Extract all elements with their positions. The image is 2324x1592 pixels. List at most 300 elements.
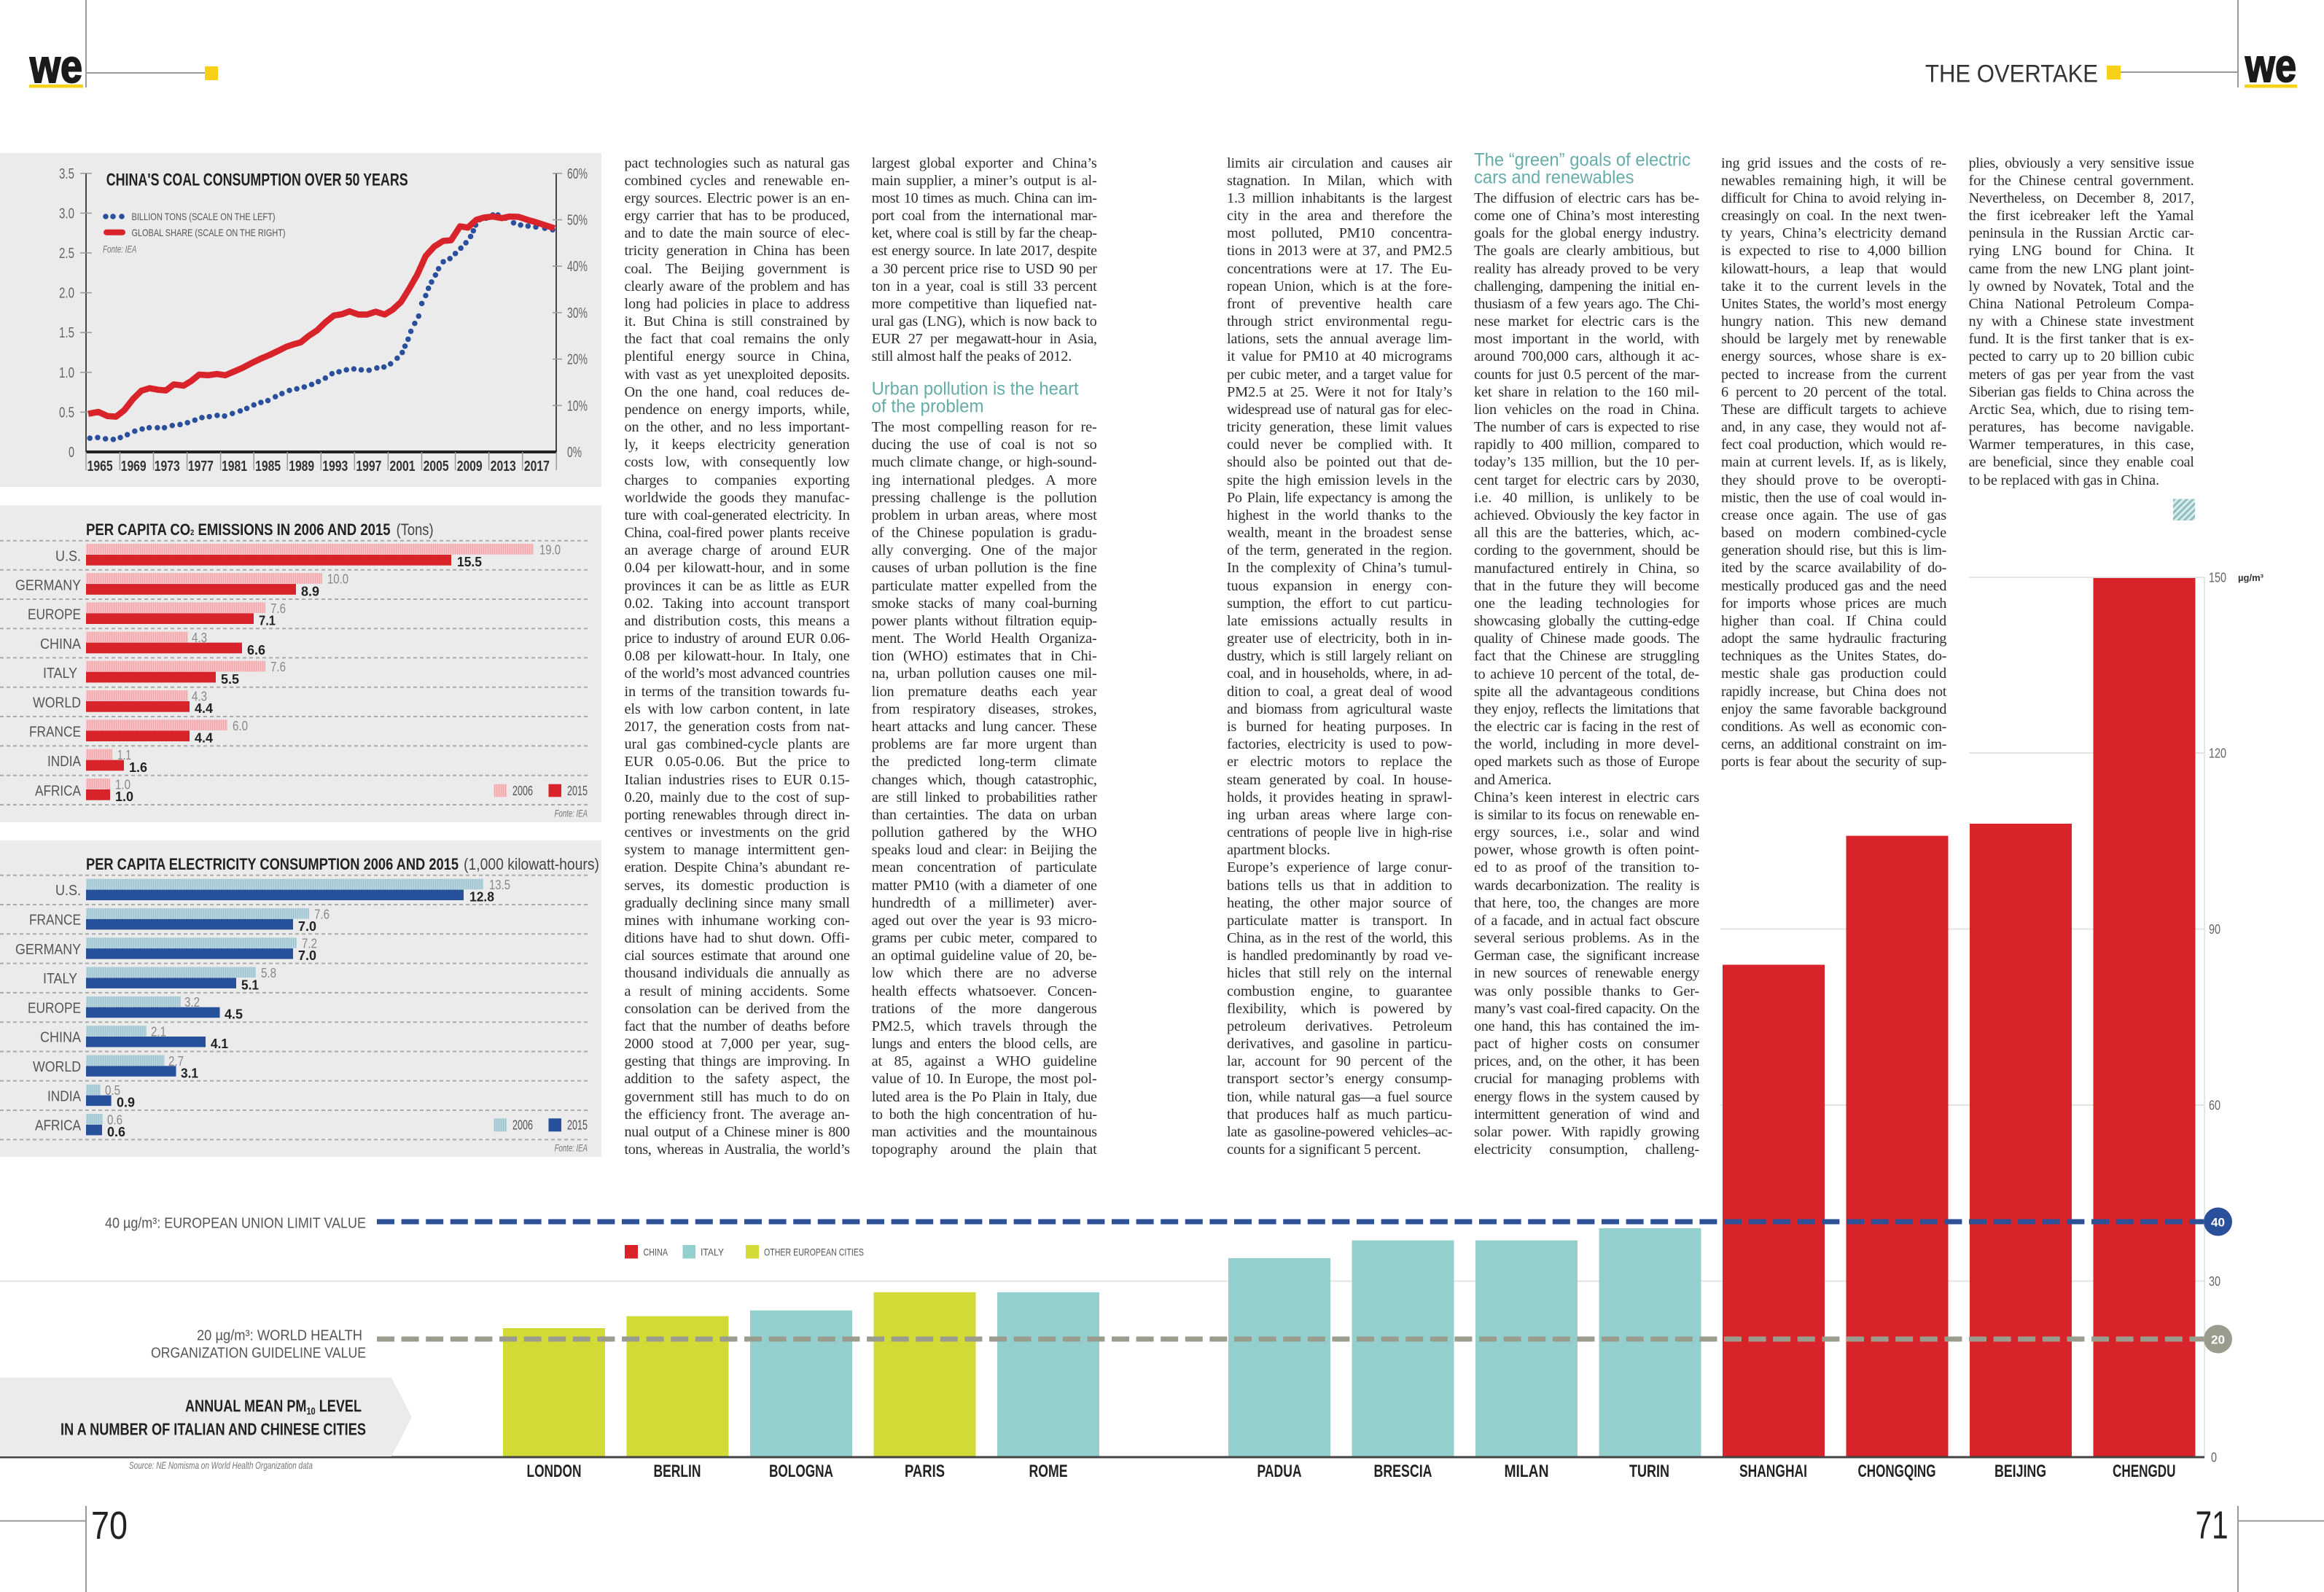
text column 5: take it to the current levels in the [1721,278,1946,294]
text column 2: low which there are no adverse [872,965,1097,981]
text column 4: of a facade, and in actual fact obscure [1474,913,1699,929]
text column 2: ally converging. One of the major [872,542,1097,558]
text column 4: lion vehicles on the road in China. [1474,402,1699,418]
city labels [526,1462,2175,1481]
text column 2: much climate change, or high-sound- [872,454,1097,470]
text column 5: rapidly increase, but China does not [1721,684,1946,700]
text column 3: ropean Union, which is at the fore- [1227,278,1452,294]
header right: section title and logo: we [2245,39,2296,92]
text column 4: that in the future they will become [1474,578,1699,594]
text column 2: health effects whatsoever. Concen- [872,983,1097,999]
text column 1: charges to companies exporting [624,472,850,488]
row: Africa: 1.0 [115,789,133,804]
text column 5: conditions. As well as economic con- [1721,719,1946,735]
text column 3: China, as in the rest of the world, this [1227,930,1452,946]
row: U.S.: U.S. [55,548,81,564]
text column 2: EUR 27 per megawatt-hour in Asia, [872,331,1097,347]
row: Germany: 7.2 [302,937,317,951]
row: Germany: GERMANY [15,577,81,593]
text column 6: peratures, has become navigable. [1968,419,2194,435]
text column 1: ural gas combined-cycle plants are [624,736,850,752]
text column 1: it. But China is still constrained by [624,313,850,329]
text column 2: power plants without filtration equip- [872,613,1097,629]
bar chart: annual mean PM10 by city [0,570,2264,1481]
chart title: (Tons) [397,520,434,539]
text column 4: The goals are clearly ambitious, but [1474,243,1699,259]
row: Africa: 0.6 [107,1125,125,1139]
limit line: WHO 20: 20 [2211,1332,2225,1347]
chart legend: BILLION TONS (SCALE ON THE LEFT) [131,211,276,222]
text column 1: pendence on energy imports, while, [624,402,850,418]
text column 3: it value for PM10 at 40 micrograms [1227,348,1452,364]
header right: section title and logo: THE OVERTAKE [1925,60,2098,87]
legend: 2006 and 2015 [494,784,588,798]
row: Africa: AFRICA [35,783,82,799]
text column 2: pressing challenge is the pollution [872,490,1097,506]
text column 5 [1721,155,1946,770]
text column 4: all this are the batteries, which, ac- [1474,525,1699,541]
text column 4 [1474,190,1700,1158]
text column 1: ly, it keeps electricity generation [624,437,850,453]
callout arrow: PM10 chart title: 10 [306,1405,316,1417]
text column 2: changes which, though catastrophic, [872,772,1097,788]
text column 2: largest global exporter and China’s [872,155,1097,171]
text column 2: still almost half the peaks of 2012. [872,348,1072,364]
text column 3: late emissions actually results in [1227,613,1452,629]
text column 4: spite all the advantageous conditions [1474,684,1699,700]
text column 2: than certainties. The data on urban [872,807,1097,823]
row: France: FRANCE [29,725,81,741]
text column 2: value of 10. In Europe, the most pol- [872,1071,1097,1087]
text column 2: man activities and the mountainous [872,1124,1097,1140]
text column 3: coal, and in households, where, in ad- [1227,666,1452,682]
label: EU limit value: 40 µg/m³: EUROPEAN UNION LIMIT VALUE [105,1216,366,1232]
text column 4: many’s vast coal-fired capacity. On the [1474,1001,1699,1017]
row: U.S. [55,542,561,569]
heading: urban pollution: of the problem [872,397,984,417]
text column 3: Europe’s experience of large conur- [1227,859,1452,875]
text column 4: oped markets such as those of Europe [1474,754,1699,770]
text column 3: is burned for heating purposes. In [1227,719,1452,735]
text column 3: 1.3 million inhabitants is the largest [1227,190,1452,206]
text column 3: and biomass from agricultural waste [1227,701,1452,717]
text column 1: clearly aware of the problem and has [624,278,850,294]
text column 2: from respiratory diseases, strokes, [872,701,1097,717]
header right: section title and logo [1925,0,2297,92]
row: Italy: 5.1 [241,978,259,992]
text column 4: today’s 135 million, but the 10 per- [1474,454,1699,470]
limit line: WHO 20 [377,1325,2232,1353]
right axis with percent scale: 0% [567,445,582,461]
text column 2: trations of the more dangerous [872,1001,1097,1017]
text column 4: one the leading technologies for [1474,596,1699,612]
text column 4: cent target for electric cars by 2030, [1474,472,1699,488]
text column 5: enjoy the same favorable background [1721,701,1946,717]
text column 4: ergy sources, i.e., solar and wind [1474,824,1699,840]
heading: green goals [1474,150,1691,188]
text column 3: is handled predominantly by road ve- [1227,948,1452,964]
value axis labels: 60 [2209,1098,2220,1112]
row: France: 7.6 [314,907,330,921]
text column 4: quality of Chinese made goods. The [1474,631,1699,647]
text column 1: 0.20, mainly due to the cost of sup- [624,789,850,805]
text column 4: ed to as proof of the transition to- [1474,859,1699,875]
row: Africa [35,777,133,804]
text column 5: ing grid issues and the costs of re- [1721,155,1946,171]
text column 2: ment. The World Health Organiza- [872,631,1097,647]
text column 3: dition to coal, a great deal of wood [1227,684,1452,700]
city labels: CHENGDU [2113,1462,2175,1481]
text column 6: fund. It is the first tanker that is ex- [1968,331,2194,347]
text column 3: lations, sets the annual average lim- [1227,331,1452,347]
text column 5: main at current levels. If, as is likely, [1721,454,1946,470]
text column 4: is similar to its focus on renewable en- [1474,807,1699,823]
text column 5: techniques as the Unites States, do- [1721,648,1946,664]
text column 1: gesting that things are improving. In [624,1053,850,1069]
text column 5: hungry nation. This new demand [1721,313,1946,329]
text column 1: addition to the safety aspect, the [624,1071,850,1087]
text column 2: ing international pledges. A more [872,472,1097,488]
baseline and year labels: 1981 [222,459,247,475]
text column 4: ket share in relation to the 160 mil- [1474,384,1699,400]
baseline and year labels: 2009 [457,459,483,475]
text column 2: lion premature deaths each year [872,684,1097,700]
text column 3: highest in the world thanks to the [1227,507,1452,523]
text column 5: for imports whose prices are much [1721,596,1946,612]
text column 3: tuous expansion in energy con- [1227,578,1452,594]
panel: per capita electricity consumption bar chart [0,840,601,1157]
text column 6: Siberian gas fields to China across the [1968,384,2194,400]
chart title: PER CAPITA CO2 EMISSIONS IN 2006 AND 2015 [86,520,391,539]
text column 1: mines with inhumane working con- [624,913,850,929]
text column 6 [1968,155,2194,488]
row: China [40,631,265,658]
row: France: 4.4 [195,730,213,745]
text column 5: should be largely met by renewable [1721,331,1946,347]
text column 1: costs low, with consequently low [624,454,850,470]
text column 3: wealth, meant in the broadest sense [1227,525,1452,541]
text column 3: hicles that still rely on the internal [1227,965,1452,981]
text column 4: was only possible thanks to Ger- [1474,983,1699,999]
text column 1: and distribution costs, this means a [624,613,850,629]
text column 3: most polluted, PM10 concentra- [1227,225,1452,241]
text column 5: ty years, China’s electricity demand [1721,225,1946,241]
text column 1: 0.02. Taking into account transport [624,596,850,612]
text column 3: petroleum derivatives. Petroleum [1227,1018,1452,1034]
text column 2: an optimal guideline value of 20, be- [872,948,1097,964]
text column 5: mestic shale gas production could [1721,666,1946,682]
text column 5: generation should rise, but this is lim- [1721,542,1946,558]
text column 1: long had policies in place to address [624,296,850,312]
row: China [40,1025,228,1051]
text column 6: for the Chinese central government. [1968,173,2194,189]
heading: green goals: The “green” goals of electric [1474,150,1691,171]
text column 1: government still has much to do on [624,1089,850,1105]
baseline and year labels: 1965 [87,459,113,475]
heading: green goals: cars and renewables [1474,168,1634,188]
text column 3: should also be pointed out that de- [1227,454,1452,470]
text column 4: manufactured entirely in China, so [1474,560,1699,576]
text column 5: ited by the scarce availability of do- [1721,560,1946,576]
text column 4: in new sources of renewable energy [1474,965,1699,981]
text column 3: per cubic meter, and a target value for [1227,367,1452,383]
row: Italy: 5.8 [261,966,276,980]
text column 1: combined cycles and renewable en- [624,173,850,189]
text column 4: electricity consumption, challeng- [1474,1142,1699,1158]
text column 2: na, urban pollution causes one mil- [872,666,1097,682]
text column 3: spite the high emission levels in the [1227,472,1452,488]
callout arrow: PM10 chart title: ANNUAL MEAN PM [185,1397,340,1416]
text column 3: dustry, which is still largely reliant on [1227,648,1452,664]
right axis with percent scale: 30% [567,305,588,321]
row: Italy [43,660,286,687]
text column 2: hundredth of a millimeter) aver- [872,895,1097,911]
text column 2: smoke stacks of many coal-burning [872,596,1097,612]
text column 4: most important in the world, with [1474,331,1699,347]
chart title: PER CAPITA ELECTRICITY CONSUMPTION 2006 AND 2015 [86,855,459,873]
text column 4: around 700,000 cars, although it ac- [1474,348,1699,364]
text column 3: concentrations were at 17. The Eu- [1227,261,1452,277]
text column 3: apartment blocks. [1227,842,1330,858]
icon: hatched end-of-article mark [2173,499,2195,520]
chart legend: Fonte: IEA [103,243,137,255]
text column 6: the first icebreaker left the Yamal [1968,208,2194,224]
text column 1: 2000 stood at 7,000 per year, sug- [624,1036,850,1052]
row: Europe: 7.1 [259,614,276,628]
city labels: TURIN [1629,1462,1669,1481]
row: Italy: ITALY [43,971,77,987]
text column 3: derivatives, and gasoline in particu- [1227,1036,1452,1052]
row: World: 2.7 [168,1054,184,1069]
text column 1: serves, its domestic production is [624,878,850,894]
text column 2: problem in urban areas, where most [872,507,1097,523]
text column 1: pact technologies such as natural gas [624,155,850,171]
legend: city groups: ITALY [701,1246,725,1258]
text column 1: on the other, and no less important- [624,419,850,435]
text column 2: a 30 percent price rise to USD 90 per [872,261,1097,277]
text column 1: tricity generation in China has been [624,243,850,259]
text column 3: lar, account for 90 percent of the [1227,1053,1452,1069]
text column 3: ing urban areas where large con- [1227,807,1452,823]
label: WHO guideline value [151,1328,366,1362]
text column 1: with vast as yet unexploited deposits. [624,367,850,383]
text column 1: coal. The Beijing government is [624,261,850,277]
text column 5: difficult for China to avoid relying in- [1721,190,1946,206]
city labels: SHANGHAI [1739,1462,1807,1481]
text column 2: at 85, against a WHO guideline [872,1053,1097,1069]
text column 2: more competitive than liquefied nat- [872,296,1097,312]
callout arrow: PM10 chart title [0,1378,412,1456]
text column 3: widespread use of natural gas for elec- [1227,402,1452,418]
baseline and year labels: 2013 [491,459,516,475]
text column 1: provinces it can be as little as EUR [624,578,850,594]
city labels: BRESCIA [1373,1462,1432,1481]
left axis with scale: 2.5 [59,246,74,262]
right axis with percent scale: 20% [567,352,588,368]
text column 1: els with low carbon content, in late [624,701,850,717]
text column 1: China, coal-fired power plants receive [624,525,850,541]
right axis with percent scale: 40% [567,259,588,275]
text column 5: Unites States, the world’s most energy [1721,296,1946,312]
row: China: CHINA [40,636,82,652]
row: World: WORLD [33,695,81,711]
text column 4: to achieve 10 percent of the total, de- [1474,666,1699,682]
row: India: 1.6 [129,760,147,775]
text column 1: 0.08 per kilowatt-hour. In Italy, one [624,648,850,664]
source note: Fonte: IEA [555,1142,588,1153]
value axis labels: 90 [2209,922,2220,937]
row: Italy [43,966,276,992]
text column 3: of the term, generated in the region. [1227,542,1452,558]
text column 1: centives or investments on the grid [624,824,850,840]
value axis labels: 150 [2209,570,2226,585]
right axis with percent scale: 60% [567,166,588,182]
row: Italy: 7.6 [270,660,286,674]
header left: logo and rule [29,0,218,93]
text column 1: ditions have had to shut down. Offi- [624,930,850,946]
text column 1: and to date the main source of elec- [624,225,850,241]
text column 6: China National Petroleum Compa- [1968,296,2194,312]
text column 2: aged out over the year is 93 micro- [872,913,1097,929]
legend: city groups: CHINA [643,1246,668,1258]
text column 1: of the world’s most advanced countries [624,666,850,682]
text column 5: fect coal production, which would re- [1721,437,1946,453]
label: WHO guideline value: ORGANIZATION GUIDELINE VALUE [151,1346,366,1362]
text column 3: could never be complied with. It [1227,437,1452,453]
city labels: BERLIN [653,1462,701,1481]
text column 3: transport sector’s energy consump- [1227,1071,1452,1087]
text column 2: tion (WHO) estimates that in Chi- [872,648,1097,664]
text column 3: In the complexity of China’s tumul- [1227,560,1452,576]
text column 4: showcasing globally the cutting-edge [1474,613,1699,629]
text column 1: system to manage intermittent gen- [624,842,850,858]
text column 3: er electric motors to replace the [1227,754,1452,770]
text column 5: cerns, an additional constraint on im- [1721,736,1946,752]
text column 6: meters of gas per year from the vast [1968,367,2194,383]
chart legend [103,211,286,255]
text column 2: main supplier, a miner’s output is al- [872,173,1097,189]
baseline and year labels: 2001 [389,459,416,475]
text column 6: Warmer temperatures, in this case, [1968,437,2194,453]
text column 2: port coal from the international mar- [872,208,1097,224]
legend: 2006 and 2015: 2015 [567,784,588,798]
text column 5: they should prove to be overopti- [1721,472,1946,488]
text column 3: city in the area and therefore the [1227,208,1452,224]
value axis labels: 30 [2209,1274,2220,1289]
baseline and year labels: 1989 [289,459,314,475]
text column 2: luted area is the Po Plain in Italy, due [872,1089,1097,1105]
text column 6: peninsula in the Russian Arctic car- [1968,225,2194,241]
text column 2: to both the high concentration of hu- [872,1107,1097,1123]
text column 4: prices, and, on the other, it has been [1474,1053,1699,1069]
row: France: FRANCE [29,913,81,929]
text column 1: fact that the number of deaths before [624,1018,850,1034]
text column 5: creasingly on coal. In the next twen- [1721,208,1946,224]
text column 6: pected to carry up to 20 billion cubic [1968,348,2194,364]
row: China: 4.1 [211,1037,228,1051]
city labels: LONDON [526,1462,582,1481]
text column 4: thusiasm of a few years ago. The Chi- [1474,296,1699,312]
text column 4: solar power. With rapidly growing [1474,1124,1699,1140]
text column 1: tons, whereas in Australia, the world’s [624,1142,850,1158]
row: France: 6.0 [233,719,248,733]
row: U.S.: 12.8 [469,889,494,904]
text column 2: mean concentration of particulate [872,859,1097,875]
row: U.S.: 15.5 [457,555,482,569]
text column 1: worldwide the goods they manufac- [624,490,850,506]
row: World [33,690,213,716]
text column 3: factories, electricity is used to pow- [1227,736,1452,752]
text column 2: est energy source. In late 2017, despite [872,243,1097,259]
row: China: 2.1 [151,1024,166,1039]
text column 2: speaks loud and clear: in Beijing the [872,842,1097,858]
text column 1: the efficiency front. The average an- [624,1107,850,1123]
text column 5: energy sources, whose share is ex- [1721,348,1946,364]
row: India [47,1083,135,1110]
row: France [29,719,248,745]
row: Europe: 7.6 [270,601,286,616]
row: Africa: 1.0 [115,777,130,792]
text column 6: ly owned by Novatek, Total and the [1968,278,2194,294]
text column 3: counts for a significant 5 percent. [1227,1142,1421,1158]
bars: other European cities and Italian cities [503,1228,1701,1457]
left axis with scale: 1.0 [59,365,74,381]
row: India: 0.9 [117,1096,135,1110]
text column 5: 6 percent to 20 percent of the total. [1721,384,1946,400]
row: France: 7.0 [298,919,316,934]
text column 5: higher than coal. If China could [1721,613,1946,629]
text column 4: one hand, this has contained the im- [1474,1018,1699,1034]
text column 4: achieved. Obviously the key factor in [1474,507,1699,523]
text column 2: PM2.5, which travels through the [872,1018,1097,1034]
row: World: 4.3 [192,690,207,704]
text column 4: goals for the global energy industry. [1474,225,1699,241]
text column 4: challenging, dampening the initial en- [1474,278,1699,294]
legend: city groups [625,1245,864,1258]
city labels: CHONGQING [1857,1462,1936,1481]
text column 4: the electric car is facing in the rest of [1474,719,1699,735]
text column 2: heart attacks and lung cancer. These [872,719,1097,735]
callout arrow: PM10 chart title: LEVEL [316,1397,362,1416]
text column 2: particulate matter expelled from the [872,578,1097,594]
text column 4: reality has already proved to be very [1474,261,1699,277]
row: Germany: 10.0 [327,572,348,587]
text column 4: the world, including in more devel- [1474,736,1699,752]
baseline and year labels: 1993 [322,459,348,475]
text column 2: grams per cubic meter, compared to [872,930,1097,946]
left axis with scale: 2.0 [59,286,74,302]
text column 3: heating, the other major source of [1227,895,1452,911]
text column 3: sumption, the effort to cut particu- [1227,596,1452,612]
text column 2 [872,155,1097,1158]
text column 3: tion, while natural gas—a fuel source [1227,1089,1452,1105]
row: U.S.: 19.0 [539,543,561,558]
legend: 2006 and 2015: 2015 [567,1118,588,1133]
footer left: page number 70: 70 [91,1504,128,1548]
left axis with scale: 1.5 [59,325,74,341]
data series: billion tons and global share [87,212,555,442]
limit line: EU 40: 40 [2211,1216,2225,1229]
text column 2: the predicted long-term climate [872,754,1097,770]
row: Europe: 4.5 [225,1007,243,1022]
text column 4: fact that the Chinese are struggling [1474,648,1699,664]
row: India: INDIA [47,1088,82,1104]
text column 4: nese market for electric cars is the [1474,313,1699,329]
text column 5: based on modern combined-cycle [1721,525,1946,541]
text column 3: centrations of people live in high-rise [1227,824,1452,840]
text column 1: ergy sources. Electric power is an en- [624,190,850,206]
text column 2: are still linked to probabilities rather [872,789,1097,805]
